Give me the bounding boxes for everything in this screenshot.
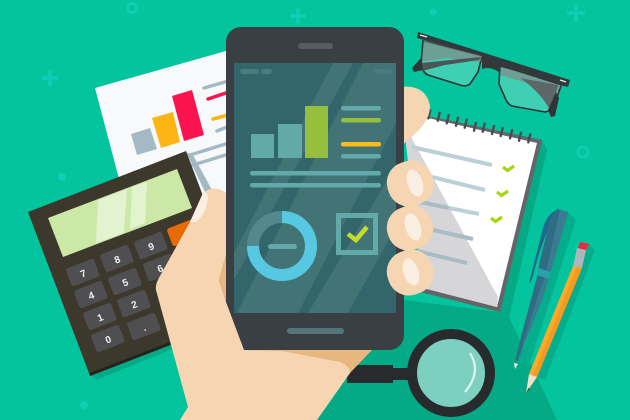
calculator keys: . <box>141 323 148 334</box>
paper report with bar chart <box>95 47 240 240</box>
calculator keys: 8 <box>113 254 123 267</box>
calculator keys <box>65 218 201 353</box>
calculator keys: 6 <box>156 263 166 276</box>
frame top bar and bridge <box>417 32 570 87</box>
calculator keys: 9 <box>147 241 157 254</box>
calculator keys: 7 <box>79 268 89 281</box>
left lens <box>421 41 482 86</box>
calculator keys: 4 <box>87 290 97 303</box>
top finger behind phone <box>400 87 430 150</box>
calculator keys: 1 <box>96 312 106 325</box>
paper bar chart <box>131 90 204 155</box>
right fingers <box>381 155 439 301</box>
right lens <box>499 66 562 112</box>
donut chart <box>253 217 311 275</box>
phone <box>226 27 404 350</box>
pen <box>514 209 576 369</box>
calculator keys: 0 <box>104 334 114 347</box>
glasses <box>412 32 570 117</box>
phone bar chart <box>251 106 328 158</box>
paper text lines <box>190 80 232 165</box>
calculator keys: 2 <box>130 299 140 312</box>
phone screen <box>234 63 396 313</box>
calculator screen <box>48 169 192 257</box>
status bar <box>240 69 392 74</box>
hand and thumb <box>156 188 350 420</box>
hand palm behind phone <box>219 255 372 373</box>
notebook <box>405 110 547 322</box>
notebook spiral binding <box>428 110 530 142</box>
calculator <box>28 151 254 380</box>
thumbnail <box>190 192 208 222</box>
phone speaker <box>298 43 333 49</box>
pencil <box>526 242 595 393</box>
notebook lines <box>412 147 492 263</box>
notebook hand shadow <box>405 135 498 307</box>
checkbox <box>338 216 376 252</box>
magnifying glass <box>347 334 490 412</box>
temple tips <box>412 58 559 117</box>
phone text lines <box>250 106 381 188</box>
notebook check marks <box>491 166 514 222</box>
lens reflections <box>422 41 482 62</box>
phone home button <box>287 328 344 334</box>
calculator keys: 5 <box>121 277 131 290</box>
